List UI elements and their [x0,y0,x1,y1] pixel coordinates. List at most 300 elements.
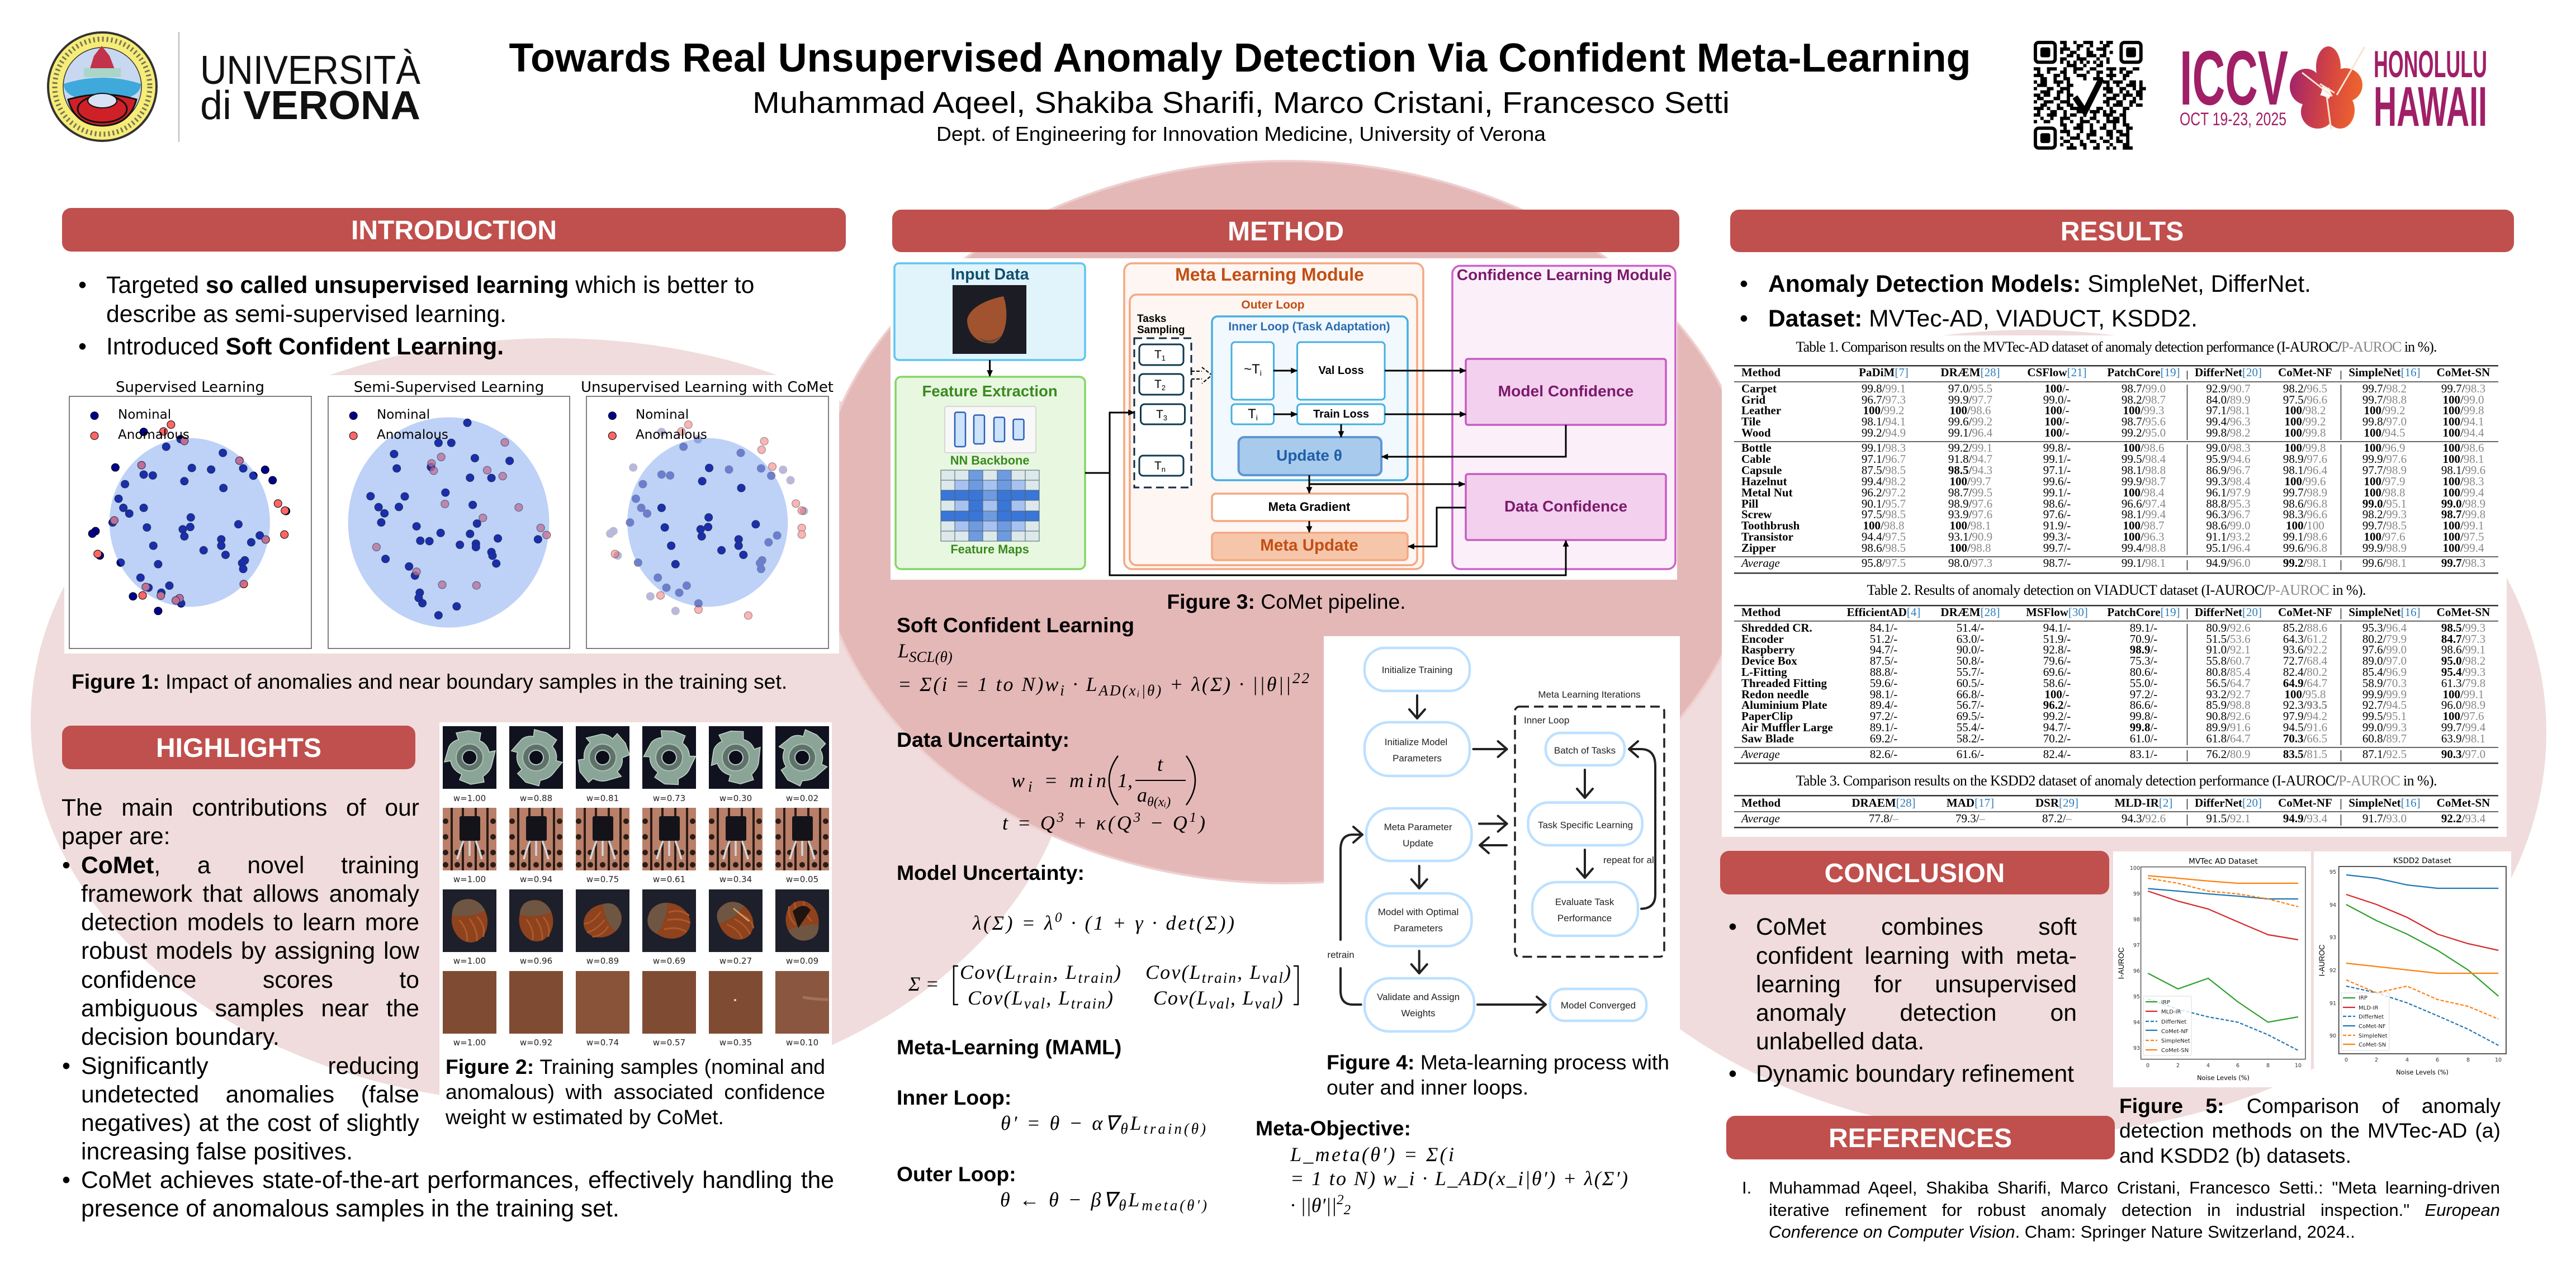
equations: data uncertainty: = min [1036,769,1106,792]
equations: meta-objective: 2 [1344,1202,1351,1218]
table 3: KSDD2 results: SimpleNet[16] [2348,796,2421,809]
table 3: KSDD2 results: DifferNet[20] [2195,796,2262,809]
box: input data: Input Data [951,266,1030,283]
table 2: VIADUCT results: Encoder [1741,632,1784,646]
flow labels: Initialize Training [1382,665,1452,675]
equations: model uncertainty: val [1262,969,1283,986]
table 1: MVTec-AD results: 99.7/98.5 [2362,519,2407,532]
table 1: MVTec-AD results: 100/99.4 [2442,541,2484,555]
tasks sampling: T [1154,348,1162,361]
figure 2: training samples grid: w=0.89 [586,956,619,966]
table 1: MVTec-AD results: Leather [1741,404,1781,417]
table 1: MVTec-AD results: 86.9/96.7 [2206,463,2251,477]
heading: introduction [62,208,846,252]
table 2: VIADUCT results: 100/99.1 [2442,688,2484,701]
table 2: VIADUCT results: 64.9/64.7 [2283,676,2327,690]
table 1: MVTec-AD results: 100/98.8 [2364,486,2405,499]
table 2: VIADUCT results: 99.2/- [2043,709,2071,723]
inner loop: Train Loss [1313,408,1369,420]
equations: model uncertainty: val [1024,995,1045,1012]
tasks sampling: T [1154,378,1162,391]
table 1: MVTec-AD results: 100/- [2044,404,2070,417]
table 2: VIADUCT results: 99.8/- [2130,721,2157,734]
flow labels: Evaluate Task [1555,897,1614,907]
heading: introduction: INTRODUCTION [351,216,557,245]
box: confidence learning module: Confidence Learning Module [1457,266,1671,283]
figure 5: left line chart MVTec AD: 99 [2133,891,2140,897]
table 1: MVTec-AD results: 99.7/98.9 [2283,486,2327,499]
equations: model uncertainty: λ(Σ) = λ [973,912,1053,934]
flow labels: Weights [1401,1008,1436,1019]
table 1: MVTec-AD results: 100/99.2 [1863,404,1905,417]
table 2: VIADUCT results: 99.5/95.1 [2362,709,2407,723]
table 1: MVTec-AD results: 96.3/96.7 [2206,508,2251,521]
table 2: VIADUCT results: 56.7/- [1957,698,1984,712]
table 1: MVTec-AD results: 97.1/- [2043,463,2071,477]
table 1: MVTec-AD results: 100/96.9 [2364,441,2405,454]
text block: highlights: presence of anomalous samples in the training set. [81,1195,619,1222]
figure 5: right line chart KSDD2: 91 [2329,1001,2336,1007]
table 1: MVTec-AD results: Capsule [1741,463,1782,477]
box: feature extraction [896,377,1085,569]
authors: Muhammad Aqeel, Shakiba Sharifi, Marco Cristani, Francesco Setti [752,86,1730,120]
text block: highlights [61,794,834,1222]
text block: references: Conference on Computer Vision. Cham: Springer Nature Switzerland, 2024.. [1769,1222,2355,1242]
table 1: MVTec-AD results: 99.2/99.1 [1948,441,1992,454]
equations: data uncertainty: a [1137,784,1147,806]
legend: right chart: CoMet-SN [2359,1042,2386,1048]
text block: highlights: • [62,1053,70,1079]
table 1: MVTec-AD results: 99.7/98.3 [2441,556,2485,570]
text block: highlights: • [62,852,70,879]
figure 2: training samples grid: w=1.00 [453,1038,486,1048]
table 2: VIADUCT results: 84.7/97.3 [2441,632,2485,646]
table 2: VIADUCT results: Air Muffler Large [1741,721,1833,734]
equations: data uncertainty: i [1028,778,1033,795]
table 1: MVTec-AD results: 98.1/94.1 [1862,415,1906,428]
table 1: MVTec-AD results: Pill [1741,497,1758,510]
text block: introduction bullets [78,272,754,360]
text block: references: iterative refinement for robust anomaly detection in industrial inspection." European [1769,1200,2500,1220]
table 1: MVTec-AD results: 98.1/99.4 [2122,508,2166,521]
tasks sampling [1134,313,1191,487]
table 2: VIADUCT results: 79.6/- [2043,654,2071,667]
text block: highlights: The main contributions of our [61,794,419,821]
table 2: VIADUCT results: 87.5/- [1870,654,1897,667]
table 1: MVTec-AD results: 98.7/- [2043,556,2071,570]
figure 2: training samples grid: w=0.96 [520,956,552,966]
equations: soft confident learning: = Σ(i = 1 to N)w [898,673,1058,695]
equations: model uncertainty: Cov(L [968,987,1023,1009]
figure 5 caption [2119,1094,2501,1167]
table 3: KSDD2 results: MAD[17] [1947,796,1994,809]
figure 5: left line chart MVTec AD: 95 [2133,994,2140,1000]
table 2: VIADUCT results: 92.3/93.5 [2283,698,2327,712]
table 1: MVTec-AD results: 98.1/98.8 [2122,463,2166,477]
equations: meta-learning MAML: L [1128,1188,1139,1211]
table 1: MVTec-AD results: 99.0/- [2043,393,2071,406]
table 1: MVTec-AD results: 91.8/94.7 [1948,452,1992,466]
icon: QR code [2034,42,2146,148]
equations: soft confident learning: SCL(θ) [909,648,953,665]
table 1: MVTec-AD results: Transistor [1741,530,1793,543]
arrows: pipeline connectors [990,360,1566,575]
table 1: MVTec-AD results: 98.6/- [2043,497,2071,510]
figure 5: left line chart MVTec AD: 6 [2236,1063,2239,1069]
table 1: MVTec-AD results: 96.7/97.3 [1862,393,1906,406]
equations: model uncertainty: , L [1237,961,1261,983]
legend: right chart: MLD-IR [2359,1005,2378,1011]
background: pale pink ellipses [31,161,2546,1135]
flow labels: Update [1403,838,1433,849]
figure 5: left line chart MVTec AD: 2 [2176,1063,2180,1069]
figure 2: training samples grid: w=0.75 [586,874,619,884]
table 3: KSDD2 results: 77.8/– [1869,812,1898,825]
equations: meta-objective [1256,1116,1628,1218]
heading: references [1726,1116,2115,1159]
tasks sampling: T [1156,408,1163,421]
table 1: MVTec-AD results: 94.9/96.0 [2206,556,2251,570]
table 1: MVTec-AD results: 100/98.7 [2123,519,2165,532]
figure 5: right line chart KSDD2: 8 [2466,1057,2470,1063]
table 1: MVTec-AD results: CSFlow[21] [2027,366,2087,379]
table 3: KSDD2 results: MLD-IR[2] [2115,796,2172,809]
flow nodes [1365,648,1646,1031]
table 1: MVTec-AD results: Toothbrush [1741,519,1800,532]
text block: highlights: ambiguous samples near the [81,995,419,1022]
results table panel [1722,335,2507,837]
table 2: VIADUCT results: 99.7/99.4 [2441,721,2485,734]
inner loop [1212,316,1408,480]
table 2: VIADUCT results: 93.2/92.7 [2206,688,2251,701]
logo: ICCV Honolulu Hawaii: HAWAII [2374,75,2487,138]
text block: highlights: CoMet achieves state-of-the-art performances, effectively handling the [81,1167,834,1194]
equations: model uncertainty: train [1078,969,1113,986]
plot: semi-supervised learning: Nominal [377,408,430,422]
equations: meta-learning MAML: Meta-Learning (MAML) [897,1035,1121,1059]
equations: soft confident learning: · L [1066,673,1097,695]
equations: meta-objective: = 1 to N) w_i · L_AD(x_i|θ′) + λ(Σ′) [1290,1167,1628,1190]
equations: model uncertainty: , L [1046,987,1070,1009]
table 1: MVTec-AD results: 99.1/- [2043,486,2071,499]
text block: conclusion bullets [1729,913,2077,1087]
table 1: MVTec-AD results: 88.8/95.3 [2206,497,2251,510]
table 2: VIADUCT results: 63.0/- [1957,632,1984,646]
equations: soft confident learning [897,613,1309,699]
figure 2: training samples grid: w=0.74 [586,1038,619,1048]
table 1: MVTec-AD results: 100/99.6 [2284,475,2326,488]
text block: references: Muhammad Aqeel, Shakiba Sharifi, Marco Cristani, Francesco Setti.: "Meta learning-driven [1769,1178,2500,1197]
box: feature extraction: Feature Maps [950,542,1029,556]
table 2: VIADUCT results: 96.0/98.9 [2441,698,2485,712]
text block: conclusion bullets: unlabelled data. [1756,1028,1924,1055]
table 1: MVTec-AD results: 100/99.1 [2442,519,2484,532]
plot: semi-supervised learning: Anomalous [377,428,448,442]
table 2: VIADUCT results: 61.8/64.7 [2206,732,2251,745]
table 1: MVTec-AD results: PatchCore[19] [2107,366,2180,379]
table 1: MVTec-AD results: 99.0/95.1 [2362,497,2407,510]
table 1: MVTec-AD results: 99.1/- [2043,452,2071,466]
affiliation: Dept. of Engineering for Innovation Medicine, University of Verona [936,122,1546,145]
box: meta update: Meta Update [1260,536,1358,555]
table 1: MVTec-AD results: 97.0/95.5 [1948,382,1992,395]
table 2: VIADUCT results: 95.0/98.2 [2441,654,2485,667]
table 2: VIADUCT results: 83.1/- [2130,747,2157,761]
table 1: MVTec-AD results: 99.5/98.4 [2122,452,2166,466]
table 2: VIADUCT results: 93.6/92.2 [2283,643,2327,656]
table 2: VIADUCT results: 86.6/- [2130,698,2157,712]
table 2: VIADUCT results: 82.4/80.2 [2283,665,2327,679]
inner loop: Update θ [1276,447,1342,464]
table 2: VIADUCT results: DifferNet[20] [2195,605,2262,619]
table 1: MVTec-AD results: 100/94.5 [2364,426,2405,439]
table 1: MVTec-AD results: 98.9/97.6 [2283,452,2327,466]
legend: right chart: IRP [2359,995,2367,1001]
text block: introduction bullets: Introduced Soft Confident Learning. [106,333,504,360]
equations: model uncertainty: ) [1283,961,1291,983]
table 1: MVTec-AD results: 99.6/99.2 [1948,415,1992,428]
logo: University of Verona: VERONA [243,83,420,128]
legend: left chart: MLD-IR [2161,1009,2181,1015]
equations: data uncertainty: 3 [1133,810,1140,825]
figure 5: right line chart KSDD2: 6 [2436,1057,2439,1063]
box: meta update [1212,533,1408,560]
box: meta learning module: Meta Learning Module [1175,264,1364,285]
table 1: MVTec-AD results: 99.9/98.7 [2122,475,2166,488]
tasks sampling: T [1154,460,1162,472]
table 1: MVTec-AD results: 100/99.3 [2123,404,2165,417]
table 2: VIADUCT results: 55.7/- [1957,665,1984,679]
figure 2: training samples grid: w=0.81 [586,793,619,803]
table 2: VIADUCT results: 97.9/94.2 [2283,709,2327,723]
table 1: MVTec-AD results: 91.9/- [2043,519,2071,532]
table 1: MVTec-AD results: 96.2/97.2 [1862,486,1906,499]
figure 5: right line chart KSDD2: 94 [2329,902,2336,908]
figure 5: left line chart MVTec AD: 8 [2266,1063,2270,1069]
table 3: KSDD2 results: 91.5/92.1 [2206,812,2251,825]
equations: soft confident learning: L [898,640,909,662]
figure 2: training samples grid: w=0.88 [520,793,552,803]
equations: meta-learning MAML [897,1035,1207,1214]
table 1: MVTec-AD results: 100/98.1 [2442,452,2484,466]
table 2: VIADUCT results: 60.5/- [1957,676,1984,690]
plot: supervised learning: Supervised Learning [116,379,264,396]
table 1: MVTec-AD results: 96.1/97.9 [2206,486,2251,499]
table 2: VIADUCT results: 70.3/66.5 [2283,732,2327,745]
table 2: VIADUCT results: 95.4/99.3 [2441,665,2485,679]
equations: data uncertainty: θ(xᵢ) [1147,795,1171,809]
table 1: MVTec-AD results: 95.1/96.4 [2206,541,2251,555]
text block: introduction bullets: • [78,272,87,299]
equations: soft confident learning: 22 [1292,670,1309,686]
table 1: MVTec-AD results: 100/- [2044,382,2070,395]
table 1: MVTec-AD results: 98.3/96.6 [2283,508,2327,521]
table 1: MVTec-AD results: 91.1/93.2 [2206,530,2251,543]
figure 5: left line chart MVTec AD: 96 [2133,968,2140,974]
figure 2: training samples grid: w=0.69 [653,956,685,966]
equations: data uncertainty: t = Q [1002,812,1055,834]
table 1: MVTec-AD results: 99.7/98.3 [2441,382,2485,395]
table 2: VIADUCT results: 97.2/- [1870,709,1897,723]
table 2: VIADUCT results: 56.5/64.7 [2206,676,2251,690]
equations: meta-objective: · ||θ′|| [1290,1194,1337,1216]
table 2: VIADUCT results: 91.0/92.1 [2206,643,2251,656]
inner loop: T [1248,406,1256,422]
table 1: MVTec-AD results: 99.1/98.1 [2122,556,2166,570]
table 3: KSDD2 results: CoMet-SN [2437,796,2490,809]
table 2: VIADUCT results: 55.8/60.7 [2206,654,2251,667]
table 1: MVTec-AD results: 99.3/- [2043,530,2071,543]
equations: meta-learning MAML: train(θ) [1144,1120,1206,1137]
plot: unsupervised learning with CoMet: Nominal [636,408,689,422]
table 3: KSDD2 results: Method [1741,796,1781,809]
equations: meta-objective: Meta-Objective: [1256,1116,1411,1140]
figure 3: CoMet pipeline [891,258,1677,580]
box: input data [894,263,1085,360]
table 1: MVTec-AD results: 100/98.6 [2442,441,2484,454]
table 1: MVTec-AD results: 98.6/98.5 [1862,541,1906,555]
table 1: MVTec-AD results: 99.8/99.1 [1862,382,1906,395]
equations: data uncertainty: 1 [1190,810,1196,825]
table 3: KSDD2 results: DRAEM[28] [1852,796,1916,809]
figure 5: left line chart MVTec AD: MVTec AD Dataset [2189,857,2258,866]
equations: model uncertainty: train [1017,969,1052,986]
text block: references: I. [1742,1178,1751,1197]
text block: highlights: detection models to learn more [81,909,419,936]
equations: model uncertainty: Model Uncertainty: [897,861,1085,884]
table 1: MVTec-AD results: 98.5/94.3 [1948,463,1992,477]
figure 2 caption: weight w estimated by CoMet. [446,1105,724,1129]
table 1: MVTec-AD results: 98.1/99.6 [2441,463,2485,477]
title: Towards Real Unsupervised Anomaly Detection Via Confident Meta-Learning [509,36,1971,80]
results table panel: Table 3. Comparison results on the KSDD2 dataset of anomaly detection performance (I-AUROC/P-AUROC in %). [1796,773,2437,789]
flow labels: Model with Optimal [1378,907,1459,917]
flow labels: Performance [1557,913,1612,924]
table 2: VIADUCT results: 59.6/- [1870,676,1897,690]
table 2: VIADUCT results: 98.5/99.3 [2441,621,2485,634]
figure 1 caption: Figure 1: Impact of anomalies and near boundary samples in the training set. [72,670,787,693]
equations: data uncertainty: 3 [1057,810,1064,825]
table 2: VIADUCT results: Redon needle [1741,688,1809,701]
figure 5: right line chart KSDD2: 4 [2405,1057,2409,1063]
table 2: VIADUCT results: MSFlow[30] [2026,605,2088,619]
table 1: MVTec-AD results: 94.4/97.5 [1862,530,1906,543]
heading: conclusion: CONCLUSION [1825,859,2005,888]
table 3: KSDD2 results: 79.3/– [1955,812,1985,825]
figure 1: scatter plots [64,375,839,654]
table 2: VIADUCT results: 64.3/61.2 [2283,632,2327,646]
equations: data uncertainty: ) [1197,812,1205,834]
inner loop: Inner Loop (Task Adaptation) [1228,320,1390,333]
heading: highlights: HIGHLIGHTS [156,733,321,763]
table 2: VIADUCT results: 55.4/- [1957,721,1984,734]
legend: right chart: DifferNet [2359,1014,2384,1020]
figure 2: training samples grid: w=0.09 [786,956,818,966]
flow labels: Initialize Model [1385,737,1447,747]
equations: model uncertainty: Cov(L [1145,961,1201,983]
flow labels: Batch of Tasks [1554,745,1616,756]
table 1: MVTec-AD results: 99.2/98.1 [2283,556,2327,570]
equations: model uncertainty: val [1209,995,1229,1012]
figure 5: left line chart MVTec AD: 94 [2133,1020,2140,1026]
table 3: KSDD2 results: DSR[29] [2035,796,2078,809]
equations: meta-objective: 2 [1337,1192,1344,1208]
table 1: MVTec-AD results: Wood [1741,426,1771,439]
table 2: VIADUCT results: 51.9/- [2043,632,2071,646]
text block: highlights: robust models by assigning low [81,937,419,964]
equations: data uncertainty: t [1157,753,1163,775]
text block: conclusion bullets: Dynamic boundary refinement [1756,1060,2074,1087]
text block: results bullets [1740,271,2311,332]
equations: meta-objective: L_meta(θ′) = Σ(i [1290,1143,1454,1166]
logo: University of Verona [48,32,420,142]
figure 5: left line chart MVTec AD: 93 [2133,1045,2140,1052]
text block: highlights: negatives) at the cost of slightly [81,1110,419,1137]
equations: model uncertainty [897,861,1298,1012]
box: feature extraction: Feature Extraction [922,382,1058,400]
table 2: VIADUCT results: 80.6/- [2130,665,2157,679]
equations: data uncertainty: − Q [1143,812,1187,834]
table 1: MVTec-AD results: 99.8/- [2043,441,2071,454]
table 2: VIADUCT results: 95.3/96.4 [2362,621,2407,634]
figure 5: right line chart KSDD2: 0 [2345,1057,2348,1063]
equations: model uncertainty: train [1202,969,1236,986]
box: confidence learning module [1452,266,1675,569]
table 1: MVTec-AD results: DifferNet[20] [2195,366,2262,379]
equations: soft confident learning: + λ(Σ) · ||θ|| [1163,673,1291,695]
equations: meta-learning MAML: L [1130,1112,1142,1134]
legend: left chart [2143,996,2191,1055]
table 1: MVTec-AD results: 99.9/97.6 [2362,452,2407,466]
figure 2: training samples grid: w=0.34 [719,874,752,884]
figure 5: left line chart MVTec AD: 0 [2146,1063,2149,1069]
table 1: MVTec-AD results: 100/98.6 [2123,441,2165,454]
text block: highlights: CoMet, a novel training [81,852,419,879]
flow labels: retrain [1327,949,1355,960]
table 2: VIADUCT results: Shredded CR. [1741,621,1812,634]
table 1: MVTec-AD results: 100/99.7 [1949,475,1991,488]
box: meta learning iterations [1515,707,1664,957]
table 1: MVTec-AD results: 95.9/94.6 [2206,452,2251,466]
table 1: MVTec-AD results: 100/100 [2286,519,2324,532]
table 1: MVTec-AD results: SimpleNet[16] [2348,366,2421,379]
table 1: MVTec-AD results: 99.8/98.2 [2206,426,2251,439]
table 1: MVTec-AD results: 98.2/99.3 [2362,508,2407,521]
table 2: VIADUCT results: 85.4/96.9 [2362,665,2407,679]
flow labels: Inner Loop [1524,715,1569,726]
table 1: MVTec-AD results: 87.5/98.5 [1862,463,1906,477]
table 2: VIADUCT results: 99.8/- [2130,709,2157,723]
legend: left chart: SimpleNet [2161,1038,2190,1044]
flow labels: Meta Learning Iterations [1538,689,1641,700]
table 1: MVTec-AD results: 98.2/96.5 [2283,382,2327,395]
table 2: VIADUCT results: CoMet-SN [2437,605,2490,619]
table 1: MVTec-AD results: 99.9/97.7 [1948,393,1992,406]
table 2: VIADUCT results: CoMet-NF [2278,605,2332,619]
table 3: KSDD2 results: Average [1741,812,1780,825]
equations: model uncertainty: train [1071,995,1105,1012]
table 1: MVTec-AD results: 99.1/98.6 [2283,530,2327,543]
table 1: MVTec-AD results: 99.2/94.9 [1862,426,1906,439]
figure 5: right line chart KSDD2: 90 [2329,1033,2336,1039]
table 2: VIADUCT results: 98.6/99.1 [2441,643,2485,656]
table 1: MVTec-AD results: 100/97.9 [2364,475,2405,488]
table 1: MVTec-AD results: 98.9/97.6 [1948,497,1992,510]
equations: model uncertainty: val [1254,995,1275,1012]
figure 2: training samples grid: w=0.57 [653,1038,685,1048]
table 1: MVTec-AD results: 96.6/97.4 [2122,497,2166,510]
heading: results [1730,210,2514,252]
